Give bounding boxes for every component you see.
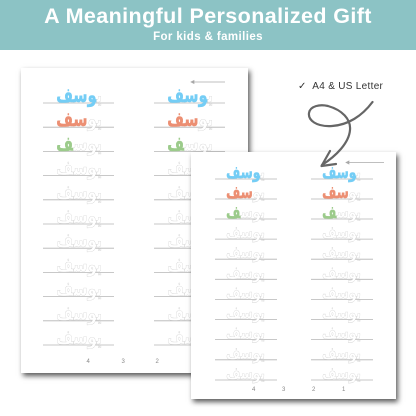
tracing names: right column xyxy=(167,85,213,350)
tracing names: left column: يوسف xyxy=(56,303,102,326)
tracing names: right column: يوسف xyxy=(167,327,213,350)
tracing names: left column: يوسف xyxy=(56,327,102,350)
tracing names: right column: يوسف xyxy=(167,85,213,108)
tracing names: left column: يوسف xyxy=(226,223,265,243)
tracing names: left column: يوسف xyxy=(226,243,265,263)
page numbers: 2 xyxy=(156,359,160,365)
tracing names: right column: يوسف xyxy=(322,223,361,243)
page numbers xyxy=(86,359,160,365)
tracing names: left column: يوسف xyxy=(56,278,102,301)
tracing names: right column: يوسف xyxy=(167,133,213,156)
callout: paper sizes: ✓ A4 & US Letter xyxy=(298,81,383,92)
tracing names: left column: يوسف xyxy=(226,263,265,283)
tracing names: right column: يوسف xyxy=(322,203,361,223)
panel: left worksheet page xyxy=(21,68,248,373)
tracing names: right column: يوسف xyxy=(322,324,361,343)
guide lines xyxy=(215,179,373,380)
tracing names: left column: يوسف xyxy=(226,203,265,223)
tracing names: right column: يوسف xyxy=(167,182,213,205)
tracing names: right column: يوسف xyxy=(322,263,361,283)
tracing names: left column: يوسف xyxy=(56,254,102,277)
tracing names: left column: يوسف xyxy=(226,163,265,183)
tracing names: left column: يوسف xyxy=(226,283,265,303)
tracing names: right column: يوسف xyxy=(167,206,213,229)
tracing names: left column: يوسف xyxy=(226,183,265,203)
page numbers: 4 xyxy=(86,359,90,365)
tracing names: right column: يوسف xyxy=(322,344,361,363)
tracing names: right column: يوسف xyxy=(322,183,361,203)
tracing names: right column: يوسف xyxy=(322,243,361,263)
tracing names: right column: يوسف xyxy=(322,163,361,183)
direction arrow xyxy=(346,161,384,164)
tracing names: left column: يوسف xyxy=(56,109,102,132)
tracing names: left column: يوسف xyxy=(226,324,265,343)
page numbers: 1 xyxy=(342,387,346,393)
tracing names: left column: يوسف xyxy=(226,364,265,384)
page numbers: 3 xyxy=(122,359,126,365)
tracing names: left column xyxy=(226,163,265,384)
panel: right worksheet page xyxy=(191,152,396,399)
tracing names: left column: يوسف xyxy=(56,157,102,180)
tracing names: left column: يوسف xyxy=(56,182,102,205)
page numbers: 4 xyxy=(252,387,256,393)
guide lines xyxy=(43,103,225,345)
tracing names: left column: يوسف xyxy=(226,344,265,363)
tracing names: left column: يوسف xyxy=(226,304,265,323)
tracing names: right column xyxy=(322,163,361,384)
banner xyxy=(0,0,416,50)
tracing names: left column: يوسف xyxy=(56,133,102,156)
page numbers: 3 xyxy=(282,387,286,393)
tracing names: left column xyxy=(56,85,102,350)
tracing names: right column: يوسف xyxy=(322,364,361,384)
tracing names: left column: يوسف xyxy=(56,230,102,253)
tracing names: right column: يوسف xyxy=(322,283,361,303)
tracing names: right column: يوسف xyxy=(167,109,213,132)
tracing names: right column: يوسف xyxy=(167,303,213,326)
tracing names: right column: يوسف xyxy=(167,157,213,180)
tracing names: left column: يوسف xyxy=(56,85,102,108)
page numbers xyxy=(252,387,346,393)
tracing names: left column: يوسف xyxy=(56,206,102,229)
tracing names: right column: يوسف xyxy=(167,254,213,277)
direction arrow xyxy=(191,80,225,84)
title: A Meaningful Personalized Gift xyxy=(44,4,372,28)
tracing names: right column: يوسف xyxy=(322,304,361,323)
tracing names: right column: يوسف xyxy=(167,278,213,301)
tracing names: right column: يوسف xyxy=(167,230,213,253)
page numbers: 2 xyxy=(312,387,316,393)
subtitle: For kids & families xyxy=(153,30,263,42)
